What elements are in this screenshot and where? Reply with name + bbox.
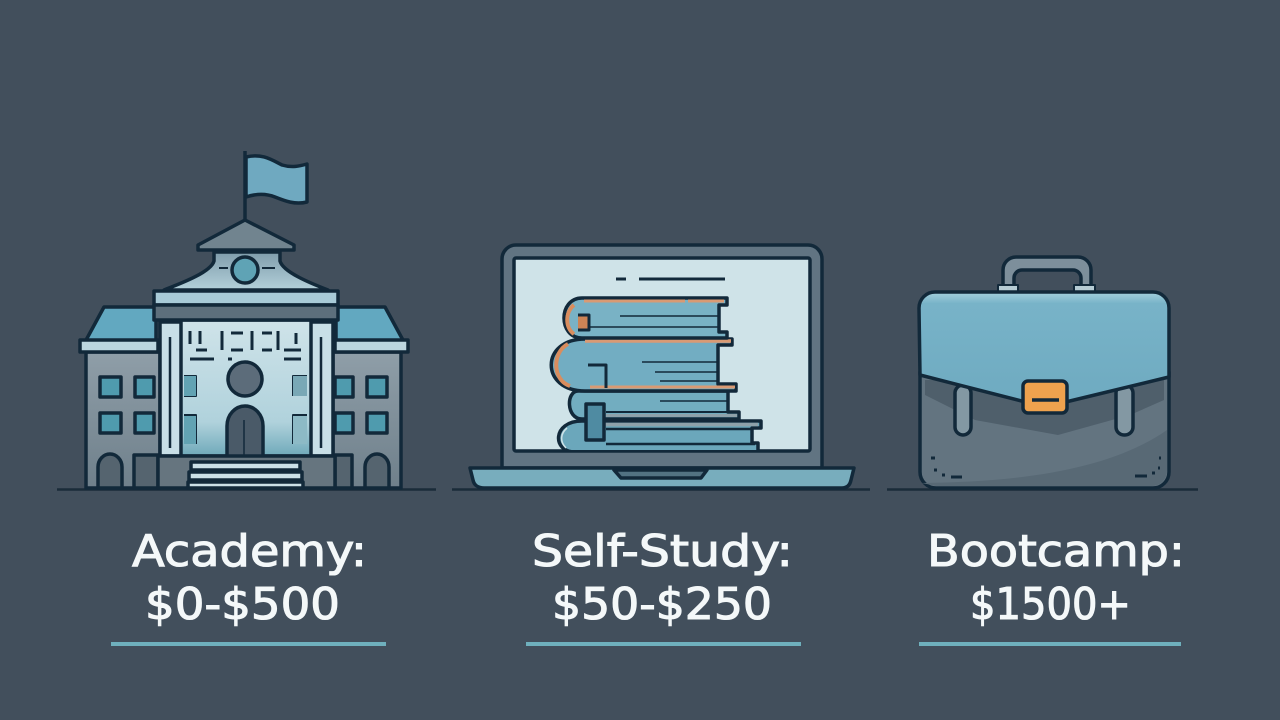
roof cap: [198, 220, 294, 250]
label: academy: Academy:: [132, 526, 367, 577]
medallion: [228, 362, 262, 396]
label: bootcamp: $1500+: [970, 579, 1131, 630]
entablature: [154, 291, 338, 320]
label: self-study: $50-$250: [552, 579, 772, 630]
label: self-study: Self-Study:: [532, 526, 793, 577]
label: self-study: [526, 526, 801, 646]
label: bootcamp: Bootcamp:: [927, 526, 1185, 577]
flap: [919, 292, 1169, 407]
stack of books: [551, 298, 761, 452]
laptop lid: [502, 245, 822, 468]
label: academy: [111, 526, 386, 646]
flag and pole: [245, 151, 307, 221]
book: third: [569, 391, 739, 419]
clasp: [1023, 381, 1067, 413]
dome with clock: [164, 252, 328, 290]
ground line: academy: [57, 488, 436, 491]
book: top, orange spine: [564, 298, 727, 338]
bookmark tab: [586, 404, 604, 440]
icon: briefcase: [887, 257, 1198, 490]
screen text lines: [616, 278, 725, 280]
stitching: [931, 458, 1161, 477]
laptop base: [470, 468, 854, 488]
columns: [160, 322, 333, 456]
central hall: [176, 320, 316, 456]
plinth and stairs: [158, 456, 335, 488]
right wing: [333, 307, 408, 488]
left wing: [80, 307, 160, 488]
entrance door: [227, 406, 263, 458]
icon: academy building: [57, 151, 436, 490]
icon: laptop with books: [452, 245, 870, 490]
label: bootcamp: [919, 526, 1185, 646]
briefcase body: [920, 372, 1169, 488]
straps: [955, 385, 1133, 435]
book: bottom: [559, 421, 761, 452]
ground line: briefcase: [887, 488, 1198, 491]
book: second, orange spine: [551, 339, 736, 391]
trackpad notch: [614, 470, 707, 478]
label: academy: $0-$500: [145, 579, 340, 630]
laptop screen: [514, 258, 810, 451]
body shadow: [925, 380, 1164, 435]
ground line: laptop: [452, 488, 870, 491]
handle: [998, 257, 1095, 293]
